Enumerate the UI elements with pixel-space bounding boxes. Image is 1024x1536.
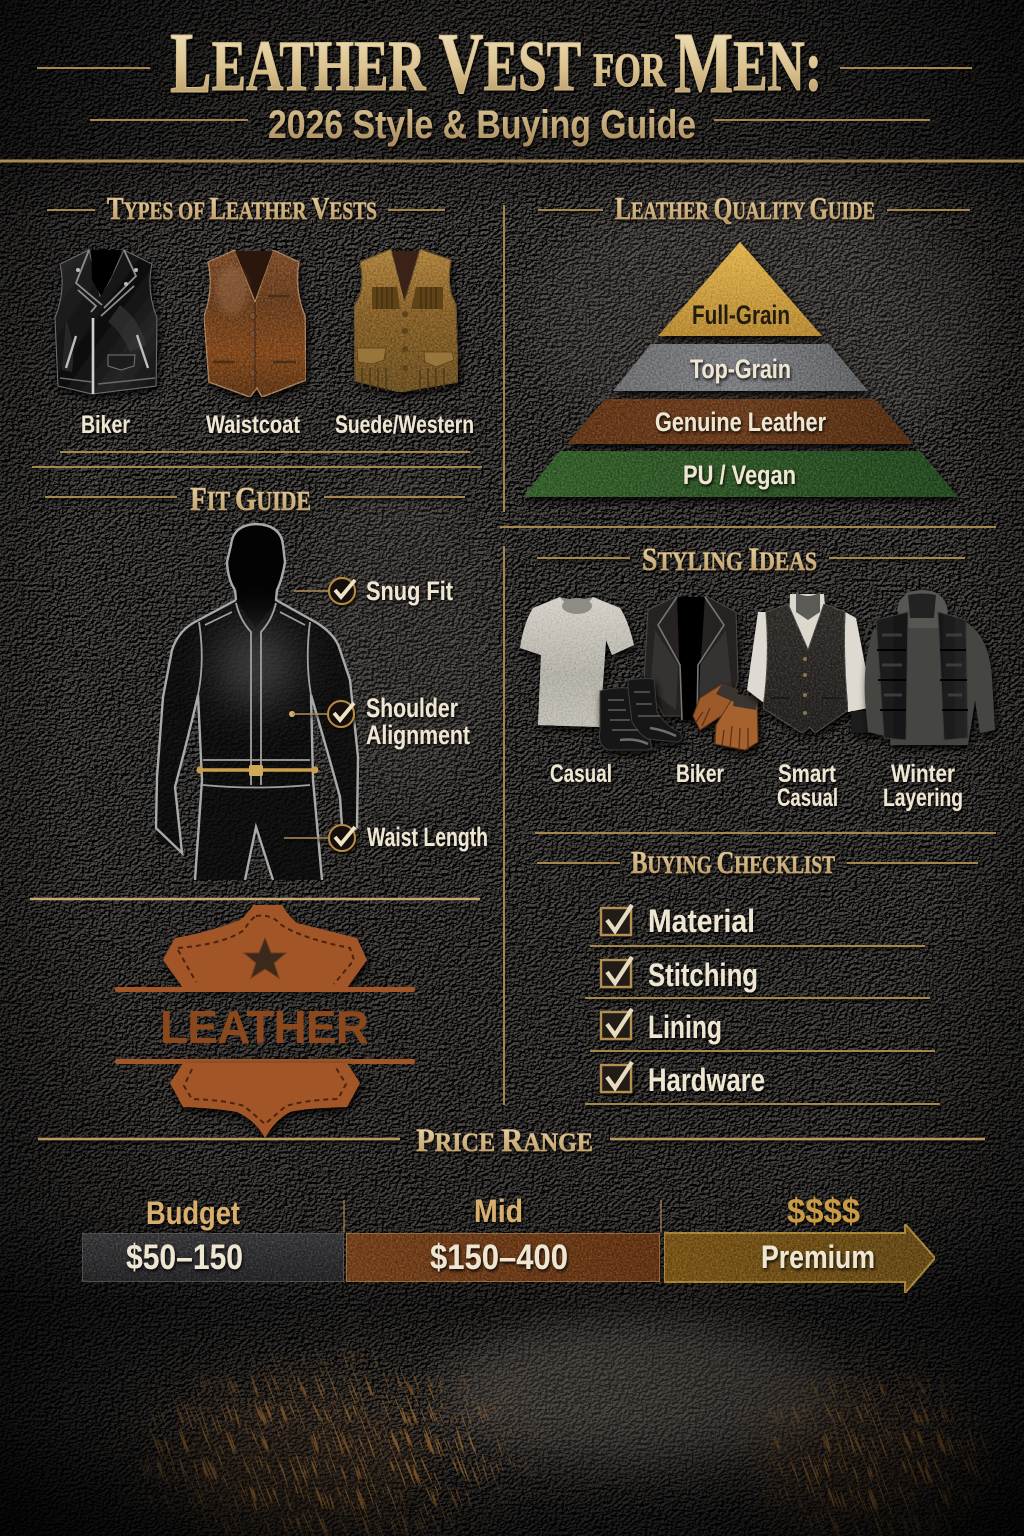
pyramid chart [523,242,958,497]
badge word: LEATHER [160,1001,369,1053]
tier: genuine leather: Genuine Leather [655,407,826,437]
heading: buying checklist: BUYING CHECKLIST [631,844,835,880]
panel: types of leather vests [47,190,474,439]
badge top shape [163,905,367,988]
vest type labels: Suede/Western [335,411,474,439]
styling labels: Casual [777,784,838,812]
tier: top-grain: Top-Grain [690,354,791,384]
segment: budget: $50–150 [126,1238,243,1277]
segment: budget: Budget [146,1195,240,1231]
item: stitching: Stitching [648,957,758,993]
icon: winter puffer layering [865,590,995,745]
vest type labels [81,411,474,439]
title: EN: [733,26,822,106]
callout: shoulder alignment: Shoulder [366,693,458,723]
vest type labels: Biker [81,411,130,439]
tier: full-grain [658,242,822,336]
heading: price range: PRICE RANGE [416,1123,593,1159]
item: material [590,903,925,946]
panel: leather quality guide [523,190,970,497]
title: EST [484,26,593,106]
segment: premium arrow: $$$$ [787,1192,860,1231]
tier: genuine leather [567,399,913,444]
panel: price range [38,1123,985,1293]
vest type labels: Waistcoat [206,411,301,439]
badge bottom shape [170,1063,360,1138]
icon: biker jacket [644,596,738,720]
callout: snug fit [294,576,453,606]
gold belt measure line [196,765,318,776]
icon: biker vest [55,250,157,394]
tick marks [344,1200,661,1232]
heading: styling ideas: STYLING IDEAS [642,542,817,578]
panel: buying checklist [537,844,978,1104]
item: stitching [585,957,930,998]
callout: shoulder alignment [289,693,470,750]
item: lining [590,1009,935,1051]
badge rule top [115,987,415,992]
item: hardware: Hardware [648,1062,765,1098]
badge: leather emblem [115,905,415,1138]
segment: premium arrow [664,1192,935,1293]
tier: pu vegan [523,451,958,497]
title: L [170,14,212,111]
segment: budget [82,1195,344,1282]
styling labels: Winter [891,760,955,788]
title: M [674,14,733,111]
callout: shoulder alignment: Alignment [366,720,470,750]
segment: mid [346,1193,660,1282]
callout: waist length: Waist Length [367,822,488,852]
styling labels: Biker [676,760,724,788]
styling labels: Smart [778,760,837,788]
segment: mid: $150–400 [430,1238,568,1277]
styling labels: Layering [883,784,963,812]
segment: mid: Mid [474,1193,523,1229]
icon: boots [599,679,682,750]
figure: male silhouette outline [156,524,358,880]
segment: premium arrow: Premium [761,1239,875,1275]
styling labels: Casual [550,760,612,788]
title: FOR [593,44,674,97]
icon: smart casual vest and shirt [747,592,873,733]
structural divider lines [0,161,1024,1105]
callout: snug fit: Snug Fit [366,576,453,606]
heading: types: TYPES OF LEATHER VESTS [107,190,377,226]
title: V [439,14,484,111]
tier: top-grain [613,344,868,391]
title: EATHER [212,26,439,106]
icon: white t-shirt [520,597,634,727]
header [37,14,972,147]
heading: quality: LEATHER QUALITY GUIDE [615,190,875,226]
icon: gloves [693,684,758,750]
badge rule bottom [115,1059,415,1064]
heading: fit guide: FIT GUIDE [190,481,311,518]
styling labels [550,760,963,812]
icon: brown waistcoat [204,250,306,397]
tier: pu vegan: PU / Vegan [683,460,796,490]
icon: suede western vest [354,249,458,392]
tier: full-grain: Full-Grain [692,300,790,330]
panel: styling ideas [520,542,995,812]
panel: fit guide [45,481,488,880]
callout: waist length [284,822,488,852]
item: lining: Lining [648,1009,722,1045]
item: material: Material [648,903,755,939]
item: hardware [585,1062,940,1104]
subtitle: 2026 Style & Buying Guide [268,103,696,147]
